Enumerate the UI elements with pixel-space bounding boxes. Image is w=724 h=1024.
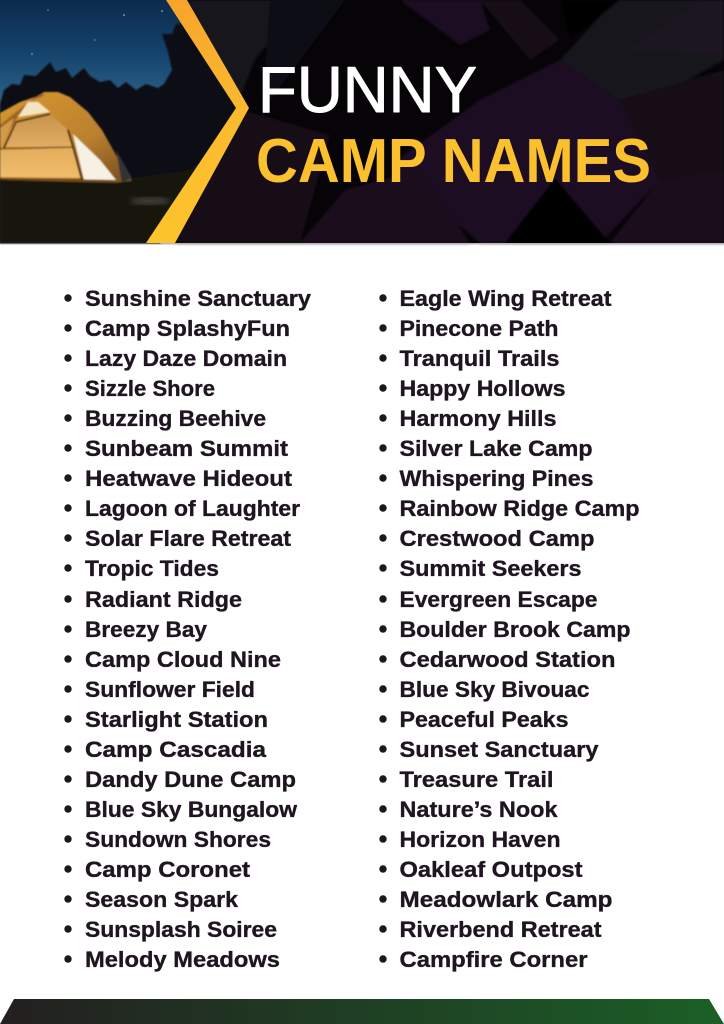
- list: left column: [64, 286, 312, 972]
- list: right column: Treasure Trail: [400, 767, 554, 792]
- list: right column: Summit Seekers: [400, 556, 582, 581]
- list: right column: Blue Sky Bivouac: [400, 677, 590, 702]
- list: right column: Silver Lake Camp: [400, 436, 592, 461]
- list: left column: Dandy Dune Camp: [85, 767, 296, 792]
- list: right column: Harmony Hills: [400, 406, 556, 431]
- title line: FUNNY: FUNNY: [258, 53, 477, 126]
- list: right column: [379, 286, 640, 972]
- list: left column: Lagoon of Laughter: [85, 496, 300, 521]
- list: right column: Whispering Pines: [400, 466, 594, 491]
- list: right column: Sunset Sanctuary: [400, 737, 599, 762]
- list: left column: Buzzing Beehive: [85, 406, 266, 431]
- title: [256, 53, 651, 196]
- list: right column: Evergreen Escape: [400, 587, 598, 612]
- trees silhouette: [0, 24, 245, 243]
- title line: CAMP NAMES: CAMP NAMES: [256, 127, 651, 196]
- list: left column: Lazy Daze Domain: [85, 346, 287, 371]
- list: right column: Meadowlark Camp: [400, 887, 612, 912]
- photo: tent at night: [0, 0, 245, 243]
- list: right column: Cedarwood Station: [400, 647, 616, 672]
- list: left column: Sunsplash Soiree: [85, 917, 277, 942]
- dark geometric background: [175, 0, 724, 243]
- list: left column: Radiant Ridge: [85, 587, 242, 612]
- list: left column: Sunshine Sanctuary: [85, 286, 312, 311]
- list: left column: Sunflower Field: [85, 677, 255, 702]
- list: left column: Camp Cloud Nine: [85, 647, 281, 672]
- list: right column: Tranquil Trails: [400, 346, 560, 371]
- list: right column: Pinecone Path: [400, 316, 558, 341]
- list: left column: Breezy Bay: [85, 617, 207, 642]
- list: left column: Sizzle Shore: [85, 376, 215, 401]
- stars: [31, 9, 163, 55]
- tent: [0, 92, 132, 183]
- list: right column: Happy Hollows: [400, 376, 566, 401]
- list: right column: Horizon Haven: [400, 827, 560, 852]
- list: right column: Riverbend Retreat: [400, 917, 602, 942]
- list: right column: Eagle Wing Retreat: [400, 286, 612, 311]
- list: left column: Sundown Shores: [85, 827, 271, 852]
- list: left column: Tropic Tides: [85, 556, 219, 581]
- list: left column: Sunbeam Summit: [85, 436, 289, 461]
- list: right column: Oakleaf Outpost: [400, 857, 583, 882]
- list: left column: Season Spark: [85, 887, 238, 912]
- list: left column: Blue Sky Bungalow: [85, 797, 297, 822]
- list: left column: Camp Coronet: [85, 857, 251, 882]
- list: left column: Solar Flare Retreat: [85, 526, 292, 551]
- yellow chevron: [146, 0, 249, 243]
- list: right column: Peaceful Peaks: [400, 707, 568, 732]
- list: right column: Crestwood Camp: [400, 526, 594, 551]
- list: left column: Melody Meadows: [85, 947, 280, 972]
- list: right column: Boulder Brook Camp: [400, 617, 630, 642]
- list: left column: Heatwave Hideout: [85, 466, 293, 491]
- list: right column: Campfire Corner: [400, 947, 588, 972]
- list: left column: Starlight Station: [85, 707, 268, 732]
- list: left column: Camp Cascadia: [85, 737, 267, 762]
- list: right column: Nature’s Nook: [400, 797, 558, 822]
- list: left column: Camp SplashyFun: [85, 316, 290, 341]
- list: right column: Rainbow Ridge Camp: [400, 496, 640, 521]
- footer band: [0, 999, 724, 1024]
- header banner: [0, 0, 724, 244]
